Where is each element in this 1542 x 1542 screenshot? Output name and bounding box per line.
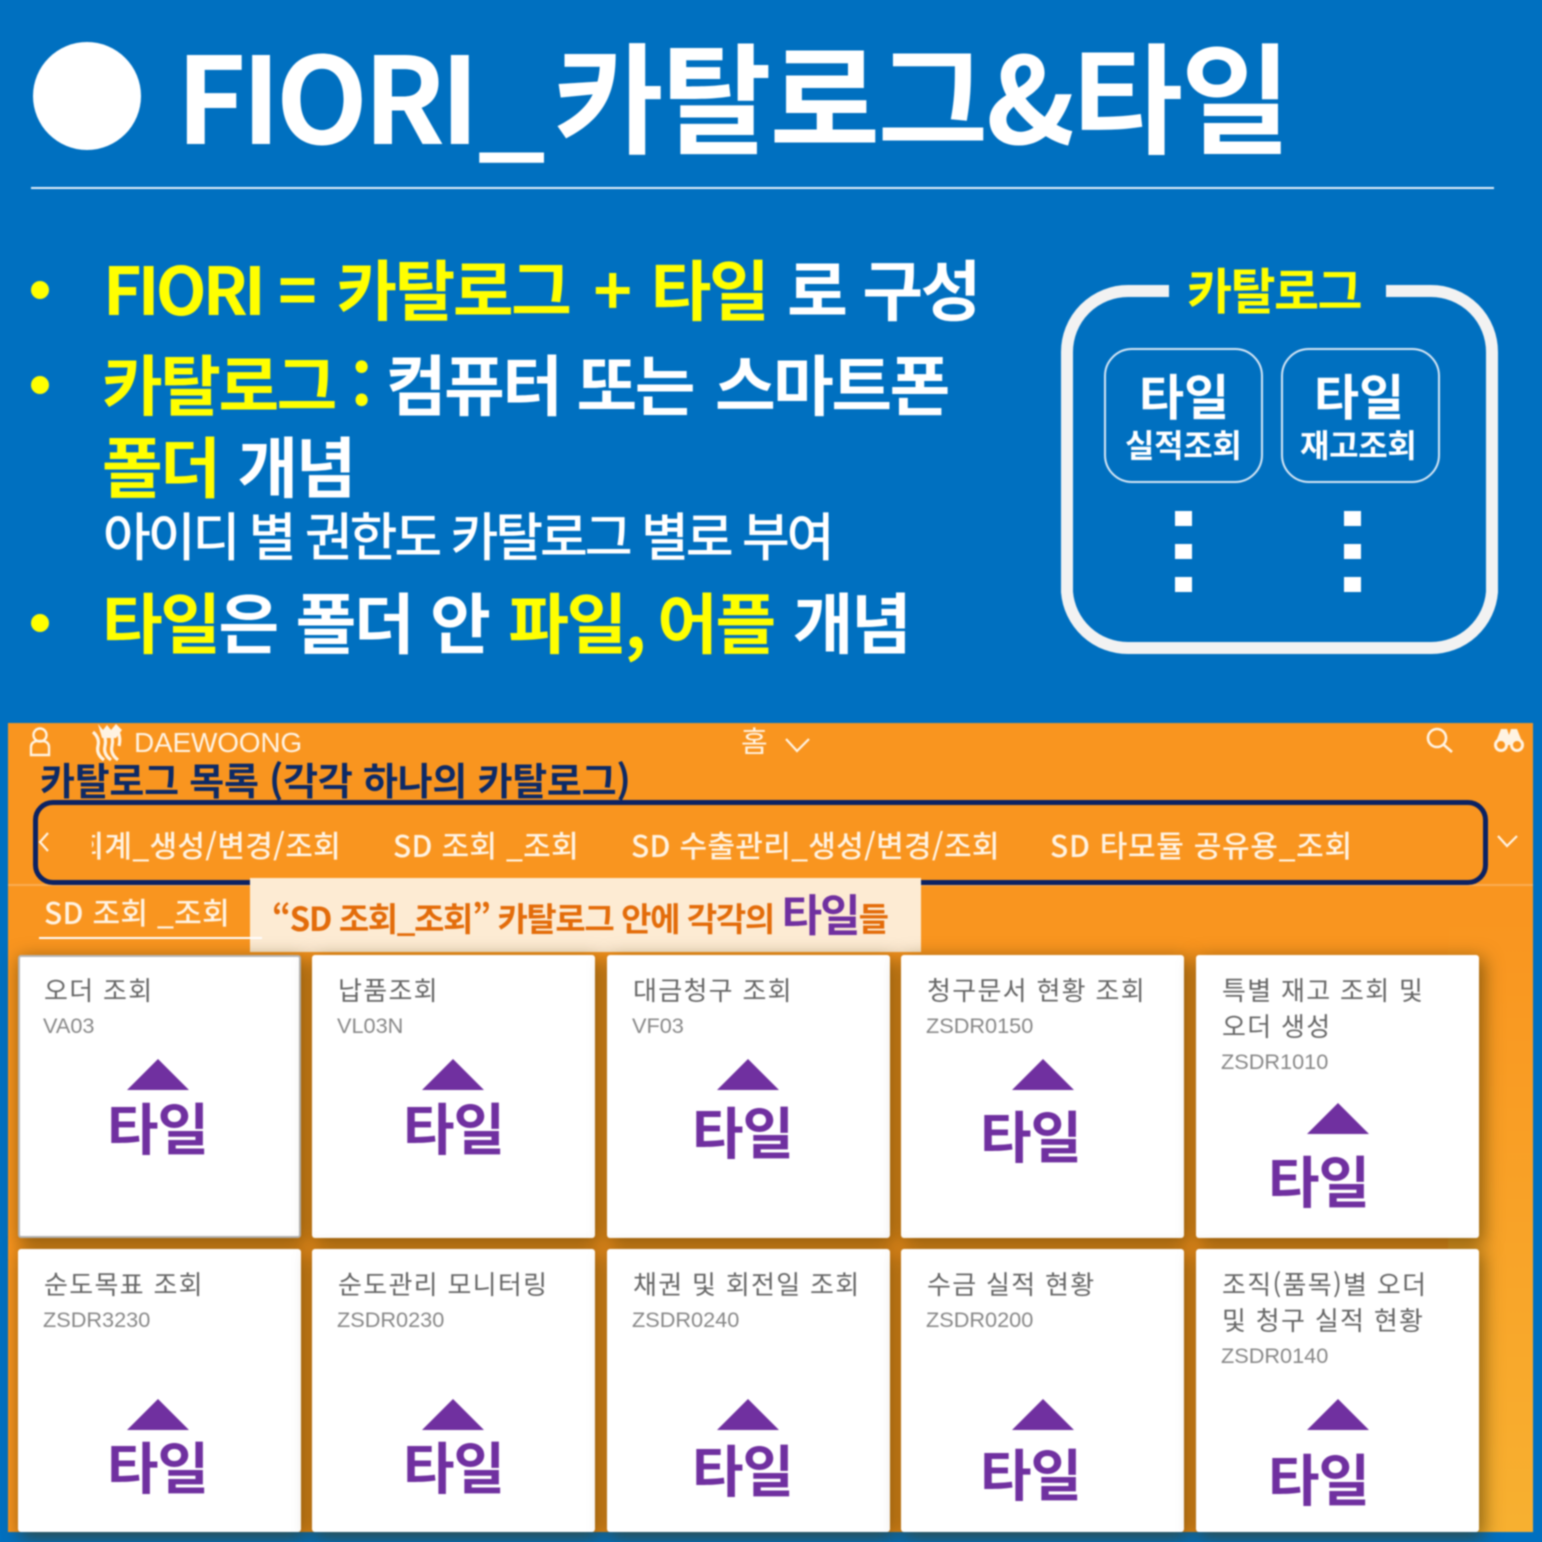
card title <box>1222 1265 1427 1338</box>
card code: ZSDR0140 <box>1221 1343 1328 1368</box>
title bullet circle <box>33 42 141 150</box>
card code: VA03 <box>43 1013 94 1038</box>
card: 순도관리 모니터링 <box>312 1249 595 1532</box>
bullet 1 text: FIORI = 카탈로그 + 타일 로 구성 <box>103 239 979 335</box>
card title: 납품조회 <box>338 971 439 1008</box>
callout text: “SD 조회_조회” 카탈로그 안에 각각의 타일들 <box>272 880 888 944</box>
card title: 채권 및 회전일 조회 <box>633 1265 861 1302</box>
selected section underline <box>39 937 262 939</box>
tile label: 타일 <box>980 1094 1081 1175</box>
card code: ZSDR0150 <box>926 1013 1033 1038</box>
catalog frame <box>1060 284 1500 656</box>
card: 채권 및 회전일 조회 <box>607 1249 890 1532</box>
tab: SD 조회: SD 조회 _조회 <box>393 822 579 866</box>
brand name: DAEWOONG <box>134 727 302 758</box>
card code: VL03N <box>337 1013 403 1038</box>
card: 수금 실적 현황 <box>901 1249 1184 1532</box>
catalog label: 카탈로그 <box>1187 253 1361 324</box>
catalog list heading: 카탈로그 목록 (각각 하나의 카탈로그) <box>40 751 630 806</box>
card title: 및 청구 실적 현황 <box>1222 1301 1424 1338</box>
card title: 순도목표 조회 <box>44 1265 204 1302</box>
card code: ZSDR0240 <box>632 1307 739 1332</box>
card code: ZSDR3230 <box>43 1307 150 1332</box>
catalog tabs highlight box <box>33 800 1488 885</box>
icon: right chevron <box>1496 834 1518 848</box>
tile label: 타일 <box>403 1086 504 1167</box>
ellipsis: left column <box>1174 510 1194 594</box>
bullet 2 note: 아이디 별 권한도 카탈로그 별로 부여 <box>103 496 831 571</box>
card title: 청구문서 현황 조회 <box>927 971 1146 1008</box>
tile label: 타일 <box>692 1090 793 1171</box>
panel: FIORI launchpad screenshot <box>8 723 1533 1532</box>
tab: SD 타모듈: SD 타모듈 공유용_조회 <box>1050 822 1353 866</box>
tile label: 타일 <box>1314 359 1404 430</box>
tile label: 타일 <box>403 1425 504 1506</box>
tab: SD 수출관리: SD 수출관리_생성/변경/조회 <box>631 822 1000 866</box>
card title: 오더 조회 <box>44 971 153 1008</box>
card: 순도목표 조회 <box>18 1249 301 1532</box>
ellipsis: right column <box>1342 510 1362 594</box>
card title <box>1222 971 1424 1044</box>
card: 특별 재고 조회 및 오더 생성 <box>1196 955 1479 1238</box>
home menu: 홈 <box>741 719 768 761</box>
tile triangle <box>127 1059 189 1090</box>
title: FIORI_카탈로그&타일 <box>176 5 1289 179</box>
icon: search <box>1426 726 1454 754</box>
callout <box>250 878 921 952</box>
card: 조직(품목)별 오더 및 청구 실적 현황 <box>1196 1249 1479 1532</box>
icon: binoculars <box>1493 728 1525 753</box>
card code: VF03 <box>632 1013 684 1038</box>
tile label: 타일 <box>1139 359 1229 430</box>
tile label: 타일 <box>107 1425 208 1506</box>
tile caption: 재고조회 <box>1300 421 1417 467</box>
tile label: 타일 <box>692 1428 793 1509</box>
bullet 3 text: 타일은 폴더 안 파일, 어플 개념 <box>102 572 909 668</box>
bullet 2 text: 카탈로그 : 컴퓨터 또는 스마트폰 <box>102 334 948 430</box>
tile triangle <box>717 1059 779 1090</box>
selected section label: SD 조회 _조회 <box>44 889 230 933</box>
tab strip divider <box>8 884 1533 886</box>
panel: bullet list <box>30 239 979 668</box>
bullet 3 dot <box>31 614 49 632</box>
tile label: 타일 <box>980 1432 1081 1513</box>
tile triangle <box>127 1399 189 1430</box>
tile triangle <box>422 1059 484 1090</box>
card: 오더 조회 <box>18 955 301 1238</box>
tile triangle <box>422 1399 484 1430</box>
tile label: 타일 <box>1268 1437 1369 1518</box>
card title: 조직(품목)별 오더 <box>1222 1265 1427 1302</box>
card code: ZSDR0200 <box>926 1307 1033 1332</box>
card: 대금청구 조회 <box>607 955 890 1238</box>
tile caption: 실적조회 <box>1125 421 1242 467</box>
panel: catalog diagram <box>1060 253 1500 656</box>
icon: user <box>28 726 52 758</box>
card title: 특별 재고 조회 및 <box>1222 971 1424 1008</box>
card title: 대금청구 조회 <box>633 971 793 1008</box>
icon: left chevron <box>38 832 50 852</box>
tile triangle <box>1012 1399 1074 1430</box>
title divider <box>31 187 1494 189</box>
tile label: 타일 <box>1268 1139 1369 1220</box>
tile label: 타일 <box>107 1086 208 1167</box>
card title: 오더 생성 <box>1222 1007 1331 1044</box>
tile triangle <box>717 1399 779 1430</box>
bullet 2 continuation: 폴더 개념 <box>102 416 354 512</box>
card code: ZSDR0230 <box>337 1307 444 1332</box>
tile triangle <box>1012 1059 1074 1090</box>
tile triangle <box>1307 1399 1369 1430</box>
card title: 순도관리 모니터링 <box>338 1265 548 1302</box>
card: 청구문서 현황 조회 <box>901 955 1184 1238</box>
tile triangle <box>1307 1103 1369 1134</box>
icon: daewoong logo <box>91 723 123 762</box>
card title: 수금 실적 현황 <box>927 1265 1095 1302</box>
tile box: 실적조회 <box>1104 348 1263 483</box>
bullet 2 dot <box>31 376 49 394</box>
lower gradient corner <box>1448 923 1533 1532</box>
bullet 1 dot <box>31 281 49 299</box>
tile box: 재고조회 <box>1281 348 1440 483</box>
card code: ZSDR1010 <box>1221 1049 1328 1074</box>
icon: home chevron <box>784 738 810 754</box>
card: 납품조회 <box>312 955 595 1238</box>
